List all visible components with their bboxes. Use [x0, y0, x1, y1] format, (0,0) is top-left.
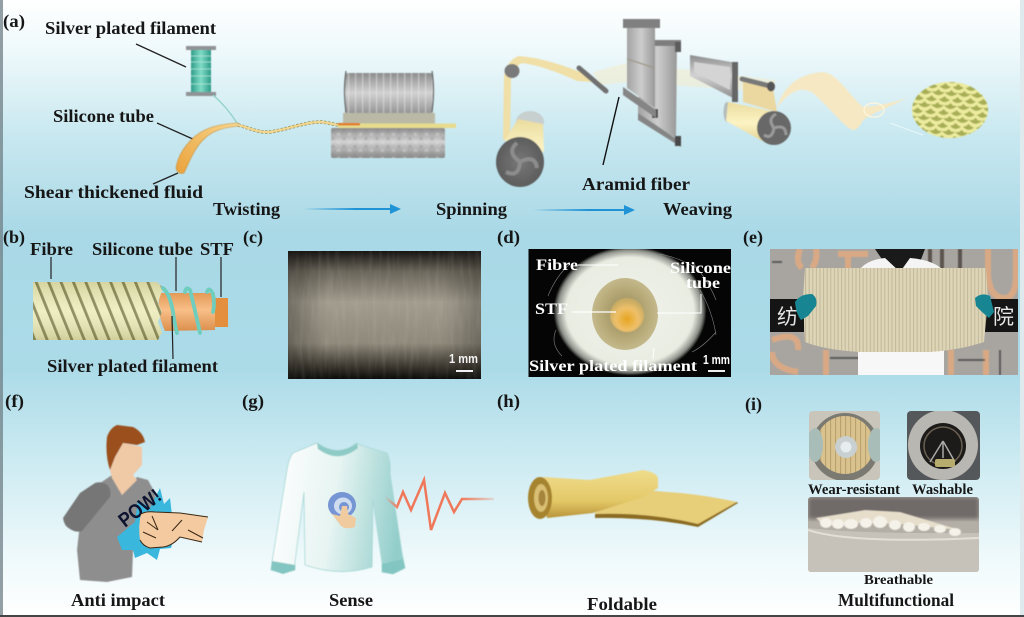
gloves — [795, 294, 816, 320]
photo labels: Silicone — [670, 260, 731, 277]
photo: breathable — [808, 497, 979, 572]
zoom marker — [864, 103, 884, 117]
pow text: POW! — [115, 485, 166, 532]
panel label c: (c) — [243, 227, 263, 248]
panel label a: (a) — [3, 11, 25, 32]
warp sheet light — [593, 63, 776, 92]
wall lettering — [772, 249, 1016, 375]
photo — [528, 247, 731, 377]
STF core — [212, 298, 228, 327]
caption: Multifunctional — [838, 590, 954, 610]
label: fibre: Fibre — [30, 239, 73, 259]
label: weaving: Weaving — [663, 199, 732, 219]
photo labels: Silver plated filament — [529, 358, 698, 375]
caption: Sense — [329, 590, 373, 610]
label: twisting: Twisting — [213, 199, 280, 219]
label: silver plated filament: Silver plated filament — [47, 356, 218, 376]
panel a: process — [3, 11, 988, 219]
take up roller end — [767, 82, 775, 92]
cloth take up sheet — [743, 82, 777, 112]
coat bottom — [858, 350, 944, 375]
reed bar — [579, 68, 606, 91]
lower roller — [331, 128, 445, 158]
panel d: cross section photo — [497, 227, 731, 377]
photo — [288, 251, 481, 379]
fabric ribbon — [777, 72, 907, 130]
arrow: spinning to weaving — [533, 205, 635, 215]
person figure — [63, 425, 160, 582]
warp beam — [496, 111, 544, 187]
leader: filament — [172, 316, 173, 359]
caption: Foldable — [587, 594, 657, 614]
upper roller — [343, 71, 435, 124]
yarn core — [238, 122, 338, 132]
fist outline and finger lines — [140, 512, 208, 548]
coat top — [861, 258, 941, 268]
zoom beam — [890, 123, 923, 135]
foam bubbles — [816, 510, 961, 536]
label: spinning: Spinning — [436, 199, 507, 219]
sign character left: 纺 — [777, 305, 798, 329]
fist — [139, 512, 208, 548]
filament thread — [213, 95, 237, 123]
photo — [770, 249, 1018, 375]
label: silicone tube: Silicone tube — [53, 106, 154, 126]
arm — [63, 482, 110, 532]
label: aramid fiber: Aramid fiber — [582, 174, 690, 194]
panel label b: (b) — [3, 227, 25, 248]
neck and face — [110, 443, 142, 495]
yarn through rollers — [338, 124, 456, 128]
panel label e: (e) — [743, 227, 763, 248]
magnified fabric weave — [912, 82, 988, 138]
weaving loom — [496, 19, 791, 187]
panel label i: (i) — [745, 394, 762, 415]
leader: silicone tube — [157, 123, 195, 140]
scale bar — [449, 351, 478, 372]
panel f: anti impact — [5, 391, 208, 610]
panel label g: (g) — [242, 391, 264, 412]
silver coil — [163, 288, 214, 333]
cloth beam — [724, 102, 791, 145]
twisted yarn — [238, 122, 338, 132]
photo: washable — [907, 410, 981, 480]
spinning rollers — [331, 71, 456, 158]
silicone tube section — [159, 293, 215, 331]
leader: filament — [136, 44, 186, 67]
silicone tube — [176, 123, 240, 173]
signal line — [385, 480, 494, 530]
scale bar: 1 mm — [449, 351, 478, 366]
take up small roller — [742, 79, 770, 86]
twisting stage — [24, 18, 338, 202]
photo labels: 1 mm — [703, 352, 730, 367]
panel h: foldable — [497, 391, 738, 614]
label: stf: STF — [200, 239, 234, 259]
black signs — [770, 299, 804, 332]
sweater — [271, 443, 405, 574]
sign character right: 院 — [993, 305, 1014, 329]
icon: filament spool — [186, 46, 216, 96]
panel i: multifunctional — [745, 394, 981, 610]
panel g: sense — [242, 391, 494, 610]
fibre sheath — [33, 282, 163, 340]
leader: aramid fiber — [603, 97, 619, 165]
person — [875, 249, 925, 268]
panel c: yarn micrograph — [243, 227, 481, 379]
photo labels — [529, 257, 731, 375]
leaders: top — [51, 257, 221, 297]
heddle frame right — [690, 55, 738, 102]
heddle frame rear — [638, 40, 681, 147]
label: silicone tube: Silicone tube — [92, 239, 193, 259]
leader: shear thickened fluid — [153, 173, 178, 184]
touch icon — [328, 492, 356, 528]
panel label d: (d) — [497, 227, 520, 248]
heddle frame front — [623, 19, 660, 118]
photo labels: Fibre — [536, 257, 578, 274]
label: silver plated filament: Silver plated filament — [45, 18, 216, 38]
arrow: twisting to spinning — [303, 204, 401, 214]
panel e: woven fabric photo — [743, 227, 1018, 375]
rolled fabric — [528, 470, 738, 527]
hair — [106, 425, 145, 470]
label: breathable: Breathable — [864, 573, 933, 588]
photo labels: tube — [686, 275, 720, 292]
back guide roller — [504, 64, 520, 78]
panel label h: (h) — [497, 391, 520, 412]
impact burst — [117, 488, 190, 560]
photo labels: STF — [535, 301, 568, 318]
label: shear thickened fluid: Shear thickened fluid — [24, 182, 203, 202]
photo: wear resistant — [809, 411, 880, 480]
caption: Anti impact — [71, 590, 165, 610]
panel label f: (f) — [5, 391, 24, 412]
label: washable: Washable — [912, 482, 974, 498]
torso — [77, 475, 160, 582]
fabric — [803, 268, 988, 352]
warp yarn — [503, 56, 593, 140]
panel b: yarn structure — [3, 227, 234, 376]
orange yarn part — [338, 123, 360, 126]
label: wear resistant: Wear-resistant — [808, 482, 900, 498]
